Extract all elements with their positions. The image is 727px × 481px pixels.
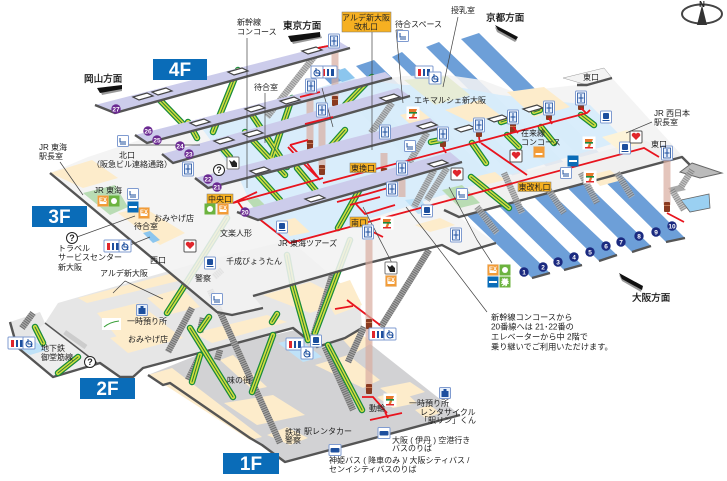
floor badge: 1F <box>223 453 279 475</box>
gate label: east ticket gate: 東改札口 <box>518 182 550 192</box>
floor badge: 1F: 1F <box>240 454 262 475</box>
purple track numbers: 24 <box>176 144 184 150</box>
navy track numbers <box>519 221 677 277</box>
direction: Okayama <box>84 73 123 95</box>
navy track numbers: 1 <box>522 270 526 276</box>
stairs and small platform east exit <box>668 163 722 212</box>
purple track numbers: 21 <box>213 184 221 192</box>
purple track numbers: 26 <box>144 128 152 136</box>
place labels: エキマルシェ新大阪 <box>414 95 486 105</box>
place labels: JR 東海ツアーズ <box>278 238 337 248</box>
stairs between 3F and 4F <box>267 53 692 233</box>
place labels: おみやげ店 <box>154 214 194 223</box>
place labels: 動輪 <box>369 403 385 413</box>
purple track numbers: 22 <box>204 176 212 184</box>
place labels: 駅レンタカー <box>304 427 352 436</box>
purple track numbers <box>111 104 250 217</box>
place labels: 警察 <box>195 273 211 283</box>
EX badge text: 券 <box>501 277 510 287</box>
note: transfer to tracks 20: エレベーターから中 2階で <box>491 332 588 342</box>
red route lines on lower floors <box>335 300 402 420</box>
place labels: サービスセンター <box>58 253 122 262</box>
EX badge text: EX <box>489 267 497 273</box>
floor: 1F concourse <box>148 320 460 462</box>
shinkansen platforms 4F <box>95 42 543 220</box>
EX badge text: EX <box>140 210 148 216</box>
note: transfer to tracks 20 <box>491 312 613 352</box>
place labels: 待合スペース <box>395 19 442 29</box>
note: transfer to tracks 20: 20番線へは 21･22番の <box>491 322 574 332</box>
place labels: 一時預り所 <box>127 316 167 326</box>
place labels: コンコース <box>521 138 561 147</box>
purple track numbers: 23 <box>185 152 193 158</box>
gate label: central: 中央口 <box>208 194 232 204</box>
place labels: 在来線 <box>521 128 545 138</box>
compass <box>682 0 722 25</box>
place labels: 授乳室 <box>451 5 475 15</box>
direction: Okayama: 岡山方面 <box>84 73 123 85</box>
purple track numbers: 27 <box>112 106 120 114</box>
navy track numbers: 5 <box>588 250 592 256</box>
EX badge text <box>99 198 510 287</box>
place labels: 千成びょうたん <box>226 256 282 266</box>
elevator shafts <box>307 50 670 394</box>
floor badge: 2F: 2F <box>96 379 119 400</box>
navy track numbers: 10 <box>668 224 676 230</box>
escalators between lower floors <box>35 218 362 410</box>
gate label: Arde Shin-Osaka <box>342 12 391 32</box>
place labels: 文楽人形 <box>220 228 252 238</box>
place labels: 駅長室 <box>39 151 63 161</box>
direction: Osaka <box>619 273 671 304</box>
floor badge: 3F <box>32 206 87 228</box>
question mark glyphs <box>69 165 222 367</box>
direction: Tokyo <box>283 20 322 44</box>
place labels: 御堂筋線 <box>41 352 73 362</box>
note: transfer to tracks 20: 新幹線コンコースから <box>491 312 572 322</box>
place labels: トラベル <box>58 244 90 253</box>
place labels: JR 西日本 <box>654 108 690 118</box>
place labels: コンコース <box>237 28 277 36</box>
direction: Kyoto <box>486 12 525 42</box>
place labels: 待合室 <box>134 221 158 231</box>
place labels: （阪急ビル連絡通路） <box>92 159 172 169</box>
place labels: 「駅リン」くん <box>420 416 476 425</box>
place labels: レンタサイクル <box>420 408 476 417</box>
navy track numbers: 3 <box>556 260 560 266</box>
navy track numbers: 9 <box>654 230 658 236</box>
place labels: 新幹線 <box>237 17 261 27</box>
floor badge: 3F: 3F <box>48 207 71 228</box>
floor badge: 4F: 4F <box>169 60 191 81</box>
stairs between lower floors <box>22 250 429 443</box>
EX badge text: EX <box>99 198 107 204</box>
floor: 3F concourse <box>50 68 697 315</box>
gate label: Arde Shin-Osaka: アルデ新大阪 <box>342 12 390 22</box>
question mark glyphs: ? <box>87 357 93 367</box>
rail platforms 1 to 10 <box>321 33 685 278</box>
question mark glyphs: ? <box>69 233 75 243</box>
leader lines <box>60 17 652 312</box>
place labels: センイシティバスのりば <box>329 465 417 474</box>
place labels: 北口 <box>119 151 135 160</box>
place labels: 大阪 ( 伊丹 ) 空港行き <box>392 435 470 445</box>
place labels: 神姫バス ( 降車のみ )/ 大阪シティバス / <box>329 455 470 465</box>
place labels: 一時預り所 <box>409 398 449 408</box>
floor badge: 2F <box>80 378 135 400</box>
place labels: 鉄道 <box>285 427 301 437</box>
gate label: Arde Shin-Osaka: 改札口 <box>354 22 378 32</box>
place labels: 東口 <box>651 139 667 149</box>
escalators between 3F and 4F <box>155 70 594 228</box>
place labels: 地下鉄 <box>41 343 65 353</box>
place labels: 西口 <box>150 256 166 265</box>
place labels: 東口 <box>583 72 599 82</box>
place labels: 駅長室 <box>654 117 678 127</box>
place labels: アルデ新大阪 <box>100 268 148 278</box>
place labels: おみやげ店 <box>128 335 168 344</box>
note: transfer to tracks 20: 乗り継いでご利用いただけます。 <box>491 342 613 352</box>
place labels: JR 東海 <box>94 185 122 195</box>
compass: N <box>699 0 705 9</box>
direction: Osaka: 大阪方面 <box>632 292 671 304</box>
place labels: 新大阪 <box>58 262 82 272</box>
purple track numbers: 25 <box>153 138 161 144</box>
navy track numbers: 8 <box>637 234 641 240</box>
purple track numbers: 20 <box>241 210 249 216</box>
question mark glyphs: ? <box>216 165 222 175</box>
place labels: JR 東海 <box>39 142 67 152</box>
place labels: 警察 <box>285 435 301 445</box>
direction: Tokyo: 東京方面 <box>283 20 322 32</box>
place labels: 待合室 <box>254 82 278 92</box>
gate label: south: 南口 <box>351 218 367 228</box>
EX badge text: EX <box>219 206 227 212</box>
navy track numbers: 7 <box>619 240 623 246</box>
navy track numbers: 4 <box>572 254 576 262</box>
navy track numbers: 6 <box>604 244 608 250</box>
gate label: transfer: 東換口 <box>351 163 375 173</box>
navy track numbers: 2 <box>541 264 545 272</box>
floor: 2F concourse <box>10 240 362 377</box>
direction: Kyoto: 京都方面 <box>486 12 525 24</box>
place labels: バスのりば <box>392 444 432 453</box>
red route lines on 3F <box>233 46 684 243</box>
floor badge: 4F <box>153 59 207 81</box>
place labels: 味の街 <box>227 375 251 385</box>
EX badge text: EX <box>387 278 395 284</box>
